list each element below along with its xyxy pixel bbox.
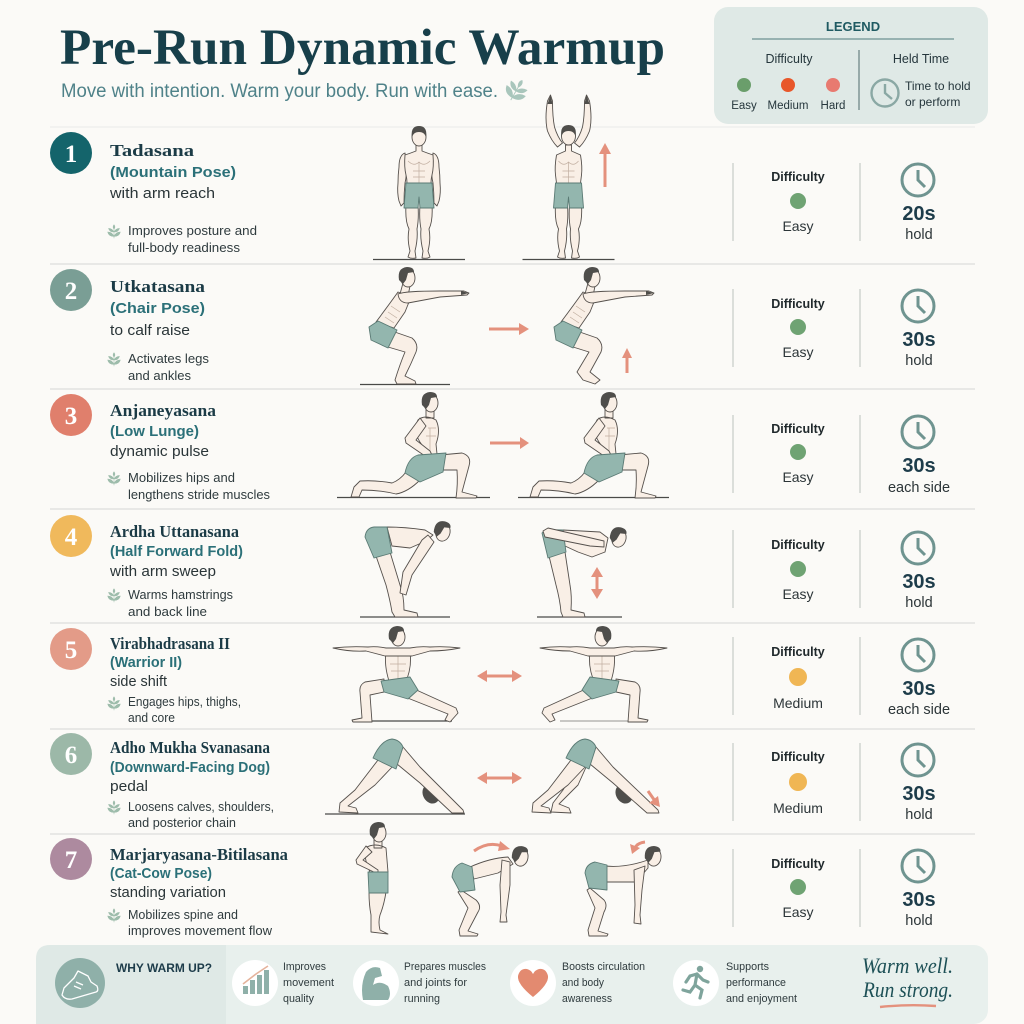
arrow: small down-right: [648, 791, 660, 807]
step number 7: [50, 838, 92, 880]
benefit: Improves posture and: [128, 224, 257, 238]
icon: leaf sprig: [502, 75, 531, 105]
row 1: Tadasana: [50, 95, 936, 260]
difficulty easy: Difficulty: [771, 297, 825, 311]
benefit: muscles and joints: and joints for: [404, 977, 467, 989]
pose name: (Chair Pose): [110, 300, 205, 317]
arrow: horizontal double: [477, 772, 522, 784]
difficulty easy: [771, 170, 825, 234]
step number 2: [50, 269, 92, 311]
arrow: curved left: [630, 842, 645, 854]
row 6: Adho Mukha Svanasana: [50, 733, 936, 830]
step number 2: 2: [65, 278, 77, 305]
hold time 30s: 30s: [902, 329, 936, 351]
hold time 30s each side: [888, 416, 950, 496]
step number 3: [50, 394, 92, 436]
benefit: [108, 224, 257, 255]
difficulty easy: [771, 538, 825, 602]
legend: held time: Time to hold: [905, 79, 971, 93]
hold time 30s each side: [888, 639, 950, 718]
benefit: and posterior chain: [128, 816, 236, 830]
benefit: [108, 908, 273, 938]
arrow: right: [489, 323, 529, 335]
benefit: Mobilizes hips and: [128, 471, 235, 485]
difficulty easy: Easy: [782, 469, 814, 485]
benefit: performance: Supports: [726, 961, 769, 973]
pose name: [109, 522, 243, 580]
difficulty easy: Difficulty: [771, 170, 825, 184]
difficulty easy: Difficulty: [771, 422, 825, 436]
hold time 30s: 30s: [902, 783, 936, 805]
difficulty easy: Easy: [782, 344, 814, 360]
pose name: (Half Forward Fold): [110, 543, 243, 560]
hold time 30s: [902, 850, 936, 929]
pose name: with arm sweep: [109, 563, 216, 580]
tagline: Run strong.: [862, 977, 953, 1002]
figure: calf raise: [554, 267, 654, 384]
icon: running shoe: [55, 958, 105, 1008]
benefit: performance: and enjoyment: [726, 993, 797, 1005]
row 4: Ardha Uttanasana: [50, 515, 936, 619]
pose name: Adho Mukha Svanasana: [110, 738, 270, 757]
pose name: standing variation: [110, 884, 226, 901]
pose name: [110, 634, 230, 690]
hold time 30s: hold: [905, 807, 933, 823]
pose name: to calf raise: [110, 322, 190, 339]
hold time 30s each side: 30s: [902, 455, 936, 477]
figure: downward-facing dog: [325, 739, 465, 814]
legend: difficulty: Easy: [731, 100, 757, 112]
arrow: up: [599, 143, 611, 187]
figure: chair pose: [360, 267, 469, 384]
arrow: vertical double: [591, 567, 603, 599]
hold time 30s: hold: [905, 595, 933, 611]
benefit: lengthens stride muscles: [128, 488, 270, 502]
pose name: [110, 738, 270, 795]
row 3: Anjaneyasana: [50, 392, 950, 502]
benefit: muscles and joints: running: [404, 993, 440, 1005]
figure: mountain pose: [373, 126, 465, 260]
legend: difficulty: [731, 52, 845, 112]
legend: difficulty: Medium: [768, 100, 808, 112]
benefit: and core: [128, 711, 175, 725]
difficulty medium: [771, 750, 825, 816]
pose name: dynamic pulse: [110, 443, 209, 460]
benefit: circulation: [510, 960, 645, 1006]
pose name: (Mountain Pose): [110, 164, 236, 181]
legend: difficulty: Difficulty: [765, 52, 813, 66]
pose name: [109, 141, 236, 202]
subtitle: Move with intention. Warm your body. Run with ease.: [61, 81, 498, 102]
benefit: and ankles: [128, 369, 191, 383]
benefit: movement quality: [232, 960, 334, 1006]
difficulty easy: Difficulty: [771, 538, 825, 552]
difficulty medium: Medium: [773, 695, 823, 711]
panel: legend: [714, 7, 988, 124]
benefit: [108, 588, 233, 619]
difficulty easy: Difficulty: [771, 857, 825, 871]
pose name: (Warrior II): [110, 654, 182, 671]
difficulty easy: Easy: [782, 218, 814, 234]
hold time 30s: hold: [905, 913, 933, 929]
figure: warrior II shift: [540, 626, 667, 722]
benefit: performance: [673, 960, 797, 1006]
difficulty easy: [771, 857, 825, 920]
benefit: improves movement flow: [128, 924, 273, 938]
benefit: muscles and joints: Prepares muscles: [404, 961, 486, 973]
pose name: Marjaryasana-Bitilasana: [110, 845, 288, 864]
benefit: Mobilizes spine and: [128, 908, 238, 922]
figure: warrior II: [333, 626, 460, 722]
pose name: (Low Lunge): [110, 423, 199, 440]
benefit: performance: performance: [726, 977, 786, 989]
benefit: movement quality: movement: [283, 977, 334, 989]
arrow: up: [622, 348, 632, 373]
footer heading: WHY WARM UP?: [116, 963, 212, 975]
benefit: Loosens calves, shoulders,: [128, 800, 274, 814]
benefit: movement quality: Improves: [283, 961, 326, 973]
hold time 30s: [902, 744, 936, 823]
step number 6: 6: [65, 742, 77, 769]
difficulty easy: [771, 422, 825, 485]
benefit: movement quality: quality: [283, 993, 314, 1005]
hold time 30s each side: each side: [888, 480, 950, 496]
benefit: and back line: [128, 605, 207, 619]
pose name: side shift: [110, 673, 168, 690]
arrow: horizontal double: [477, 670, 522, 682]
benefit: [108, 352, 209, 383]
legend heading: LEGEND: [826, 19, 880, 34]
step number 6: [50, 733, 92, 775]
legend: held time: or perform: [905, 95, 960, 109]
hold time 20s: 20s: [902, 203, 936, 225]
figure: cat: [452, 845, 530, 936]
tagline: [862, 953, 953, 1007]
figure: arm sweep: [537, 525, 629, 617]
row 5: Virabhadrasana II: [50, 626, 950, 725]
step number 4: [50, 515, 92, 557]
pose name: [110, 845, 288, 901]
benefit: [108, 695, 241, 725]
row 7: Marjaryasana-Bitilasana: [50, 822, 936, 938]
figure: low lunge: [337, 392, 490, 498]
pose name: (Cat-Cow Pose): [110, 865, 212, 882]
legend: difficulty: Hard: [821, 100, 845, 112]
step number 5: 5: [65, 637, 77, 664]
step number 5: [50, 628, 92, 670]
benefit: circulation: awareness: [562, 993, 612, 1005]
benefit: Activates legs: [128, 352, 209, 366]
step number 1: [50, 132, 92, 174]
hold time 20s: [902, 164, 936, 243]
arrow: right: [490, 437, 529, 449]
benefit: [108, 800, 274, 830]
hold time 30s each side: each side: [888, 702, 950, 718]
difficulty easy: Easy: [782, 904, 814, 920]
pose name: Tadasana: [110, 141, 195, 160]
pose name: (Downward-Facing Dog): [110, 759, 270, 776]
benefit: muscles and joints: [353, 960, 486, 1006]
benefit: circulation: and body: [562, 977, 604, 989]
step number 1: 1: [65, 141, 77, 168]
benefit: full-body readiness: [128, 241, 240, 255]
hold time 30s: [902, 290, 936, 369]
hold time 30s: 30s: [902, 571, 936, 593]
benefit: Warms hamstrings: [128, 588, 233, 602]
hold time 30s each side: 30s: [902, 678, 936, 700]
pose name: [110, 401, 217, 460]
figure: standing: [356, 822, 388, 934]
hold time 30s: hold: [905, 353, 933, 369]
hold time 20s: hold: [905, 227, 933, 243]
difficulty medium: Difficulty: [771, 645, 825, 659]
difficulty medium: Difficulty: [771, 750, 825, 764]
row 2: Utkatasana: [50, 267, 936, 384]
panel: why warm up footer: [36, 945, 988, 1024]
benefit: circulation: Boosts circulation: [562, 961, 645, 973]
step number 3: 3: [65, 403, 77, 430]
benefit: Engages hips, thighs,: [128, 695, 241, 709]
difficulty medium: Medium: [773, 800, 823, 816]
legend: held time: Held Time: [893, 52, 949, 66]
tagline: Warm well.: [862, 953, 953, 978]
arrow: curved right: [474, 841, 510, 851]
pose name: [110, 277, 206, 339]
difficulty medium: [771, 645, 825, 711]
figure: low lunge pulse: [518, 392, 669, 498]
hold time 30s: 30s: [902, 889, 936, 911]
hold time 30s: [902, 532, 936, 611]
figure: half forward fold: [360, 519, 453, 617]
pose name: Utkatasana: [110, 277, 206, 296]
figure: cow: [585, 845, 662, 936]
pose name: Ardha Uttanasana: [110, 522, 239, 541]
difficulty easy: [771, 297, 825, 360]
step number 4: 4: [65, 524, 78, 551]
pose name: Anjaneyasana: [110, 401, 217, 420]
difficulty easy: Easy: [782, 586, 814, 602]
title: Pre-Run Dynamic Warmup: [60, 20, 665, 76]
pose name: with arm reach: [109, 185, 215, 202]
figure: arm reach: [522, 95, 614, 260]
benefit: [108, 471, 270, 502]
figure: pedal: [532, 739, 659, 813]
legend: held time: [872, 52, 971, 109]
step number 7: 7: [65, 847, 77, 874]
pose name: pedal: [110, 778, 148, 795]
pose name: Virabhadrasana II: [110, 634, 230, 653]
